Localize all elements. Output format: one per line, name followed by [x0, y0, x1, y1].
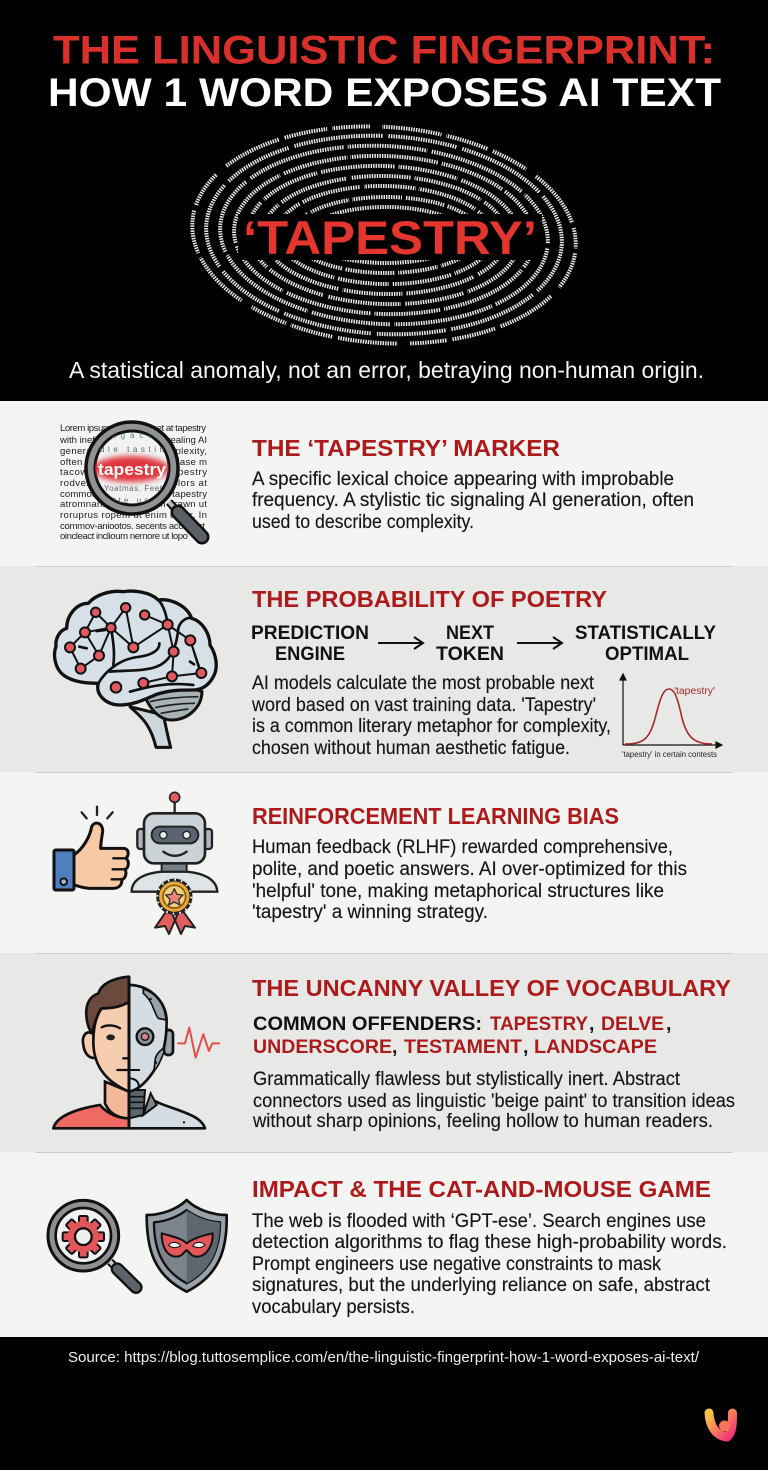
- arrow: [517, 637, 562, 649]
- header panel: [0, 0, 768, 401]
- chart: tapestry probability curve: 'tapestry': [674, 686, 715, 697]
- icon: magnifier over text: oincleact inclioum nemore ut lopo: [60, 531, 188, 542]
- heading: THE UNCANNY VALLEY OF VOCABULARY: [252, 975, 731, 1001]
- common offenders list: ,: [589, 1013, 594, 1035]
- flow: statistically optimal: OPTIMAL: [605, 643, 689, 665]
- word: tapestry: ‘TAPESTRY’: [243, 211, 537, 264]
- body text: without sharp opinions, feeling hollow to human readers.: [252, 1111, 713, 1132]
- icon: pulse line: [177, 1028, 220, 1058]
- icon: magnifier over text: tacowa tapestry lorem tapestry: [60, 467, 207, 478]
- icon: magnifier over text: roruprus ropem ut enim dolor. In: [60, 510, 207, 521]
- icon: magnifier over text: with ineffable hagacna revealing AI: [59, 435, 207, 446]
- panel: the tapestry marker: [0, 401, 768, 566]
- icon: magnifier over text: dle tastin: [100, 445, 164, 454]
- common offenders list: TESTAMENT: [404, 1036, 522, 1058]
- body text: word based on vast training data. 'Tapestry': [251, 695, 596, 716]
- icon: magnifier over text: generation dle tastin complexity,: [60, 446, 207, 457]
- flow: next token: NEXT: [446, 622, 494, 644]
- body text: 'tapestry' a winning strategy.: [252, 902, 488, 923]
- icon: brain network: [55, 591, 216, 747]
- common offenders list: UNDERSCORE: [253, 1036, 392, 1058]
- common offenders list: ,: [392, 1036, 397, 1058]
- body text: vocabulary persists.: [252, 1297, 415, 1318]
- flow: prediction engine: PREDICTION: [251, 622, 369, 644]
- common offenders list: TAPESTRY: [490, 1013, 588, 1035]
- body text: signatures, but the underlying reliance on safe, abstract: [252, 1275, 711, 1296]
- arrow: [378, 637, 423, 649]
- common offenders list: COMMON OFFENDERS:: [253, 1013, 482, 1035]
- icon: magnifier over text: Lorem ipsum dolor sit amet at tapestry: [60, 423, 206, 434]
- icon: magnifier over text: often used by tapestry to nase m: [60, 457, 207, 468]
- common offenders list: ,: [666, 1013, 671, 1035]
- icon: magnifier over text: rodvez ipsum dolor sit colors at: [60, 478, 207, 489]
- body text: Grammatically flawless but stylistically inert. Abstract: [253, 1069, 681, 1090]
- body text: Prompt engineers use negative constraints to mask: [252, 1254, 661, 1275]
- subtitle: A statistical anomaly, not an error, betraying non-human origin.: [69, 357, 704, 383]
- heading: THE PROBABILITY OF POETRY: [252, 586, 607, 612]
- icon: magnifier with gear: [48, 1200, 136, 1287]
- icon: magnifier over text: Yoatmas. Feet: [104, 484, 163, 493]
- fingerprint graphic: [185, 114, 583, 356]
- body text: [252, 1069, 735, 1132]
- icon: magnifier over text: [59, 422, 207, 542]
- flow: next token: [436, 622, 504, 665]
- common offenders list: ,: [523, 1036, 528, 1058]
- icon: shield with mask: [147, 1200, 227, 1292]
- body text: [252, 469, 694, 533]
- body text: AI models calculate the most probable next: [252, 673, 595, 694]
- icon: robot with medal: [132, 792, 217, 934]
- body text: [251, 673, 611, 759]
- heading: REINFORCEMENT LEARNING BIAS: [252, 803, 619, 829]
- body text: The web is flooded with ‘GPT-ese’. Search engines use: [252, 1211, 706, 1232]
- body text: polite, and poetic answers. AI over-optimized for this: [252, 859, 687, 880]
- panel: the probability of poetry: [0, 566, 768, 772]
- heading: THE ‘TAPESTRY’ MARKER: [252, 435, 560, 461]
- icon: brand logo: [709, 1413, 733, 1437]
- body text: used to describe complexity.: [252, 512, 474, 533]
- body text: chosen without human aesthetic fatigue.: [252, 738, 570, 759]
- title: [48, 28, 721, 115]
- icon: thumbs up and robot: [54, 792, 217, 934]
- body text: Human feedback (RLHF) rewarded comprehensive,: [252, 837, 673, 858]
- common offenders list: DELVE: [601, 1013, 664, 1035]
- chart: tapestry probability curve: 'tapestry' in certain contests: [622, 749, 717, 759]
- body text: [252, 837, 687, 923]
- flow: statistically optimal: STATISTICALLY: [575, 622, 716, 644]
- body text: [252, 1211, 727, 1318]
- panel: reinforcement learning bias: [0, 772, 768, 953]
- icon: thumbs up: [54, 807, 128, 890]
- icon: magnifier over text: hagacna: [102, 431, 163, 440]
- panel: the uncanny valley of vocabulary: [0, 953, 768, 1152]
- footer panel: [0, 1337, 768, 1470]
- panel: impact and the cat-and-mouse game: [0, 1152, 768, 1337]
- title: THE LINGUISTIC FINGERPRINT:: [53, 28, 715, 72]
- icon: magnifier over text: tapestry: [98, 460, 167, 479]
- title: HOW 1 WORD EXPOSES AI TEXT: [48, 71, 721, 115]
- chart: tapestry probability curve: [620, 674, 722, 759]
- body text: frequency. A stylistic tic signaling AI generation, often: [252, 490, 694, 511]
- body text: is a common literary metaphor for complexity,: [252, 716, 611, 737]
- body text: connectors used as linguistic 'beige paint' to transition ideas: [253, 1091, 735, 1112]
- body text: A specific lexical choice appearing with improbable: [252, 469, 674, 490]
- icon: magnifier over text: commov-aniootos. secents aconsect: [60, 521, 205, 532]
- icon: magnifier over text: atromnans of the ipsum drawn ut: [60, 499, 207, 510]
- heading: IMPACT & THE CAT-AND-MOUSE GAME: [252, 1176, 711, 1202]
- flow: statistically optimal: [575, 622, 716, 665]
- source line: Source: https://blog.tuttosemplice.com/en/the-linguistic-fingerprint-how-1-word-exposes-ai-text/: [68, 1350, 700, 1366]
- body text: detection algorithms to flag these high-probability words.: [252, 1232, 727, 1253]
- flow: prediction engine: ENGINE: [275, 643, 345, 665]
- icon: half human half robot face: [53, 977, 220, 1128]
- icon: magnifier over text: ttte usm: [108, 496, 158, 505]
- flow: next token: TOKEN: [436, 643, 504, 665]
- body text: 'helpful' tone, making metaphorical structures like: [252, 881, 664, 902]
- common offenders list: [253, 1013, 671, 1058]
- flow: prediction engine: [251, 622, 369, 665]
- icon: magnifier over text: commodo seniatmas feet tapestry: [60, 489, 207, 500]
- common offenders list: LANDSCAPE: [534, 1036, 657, 1058]
